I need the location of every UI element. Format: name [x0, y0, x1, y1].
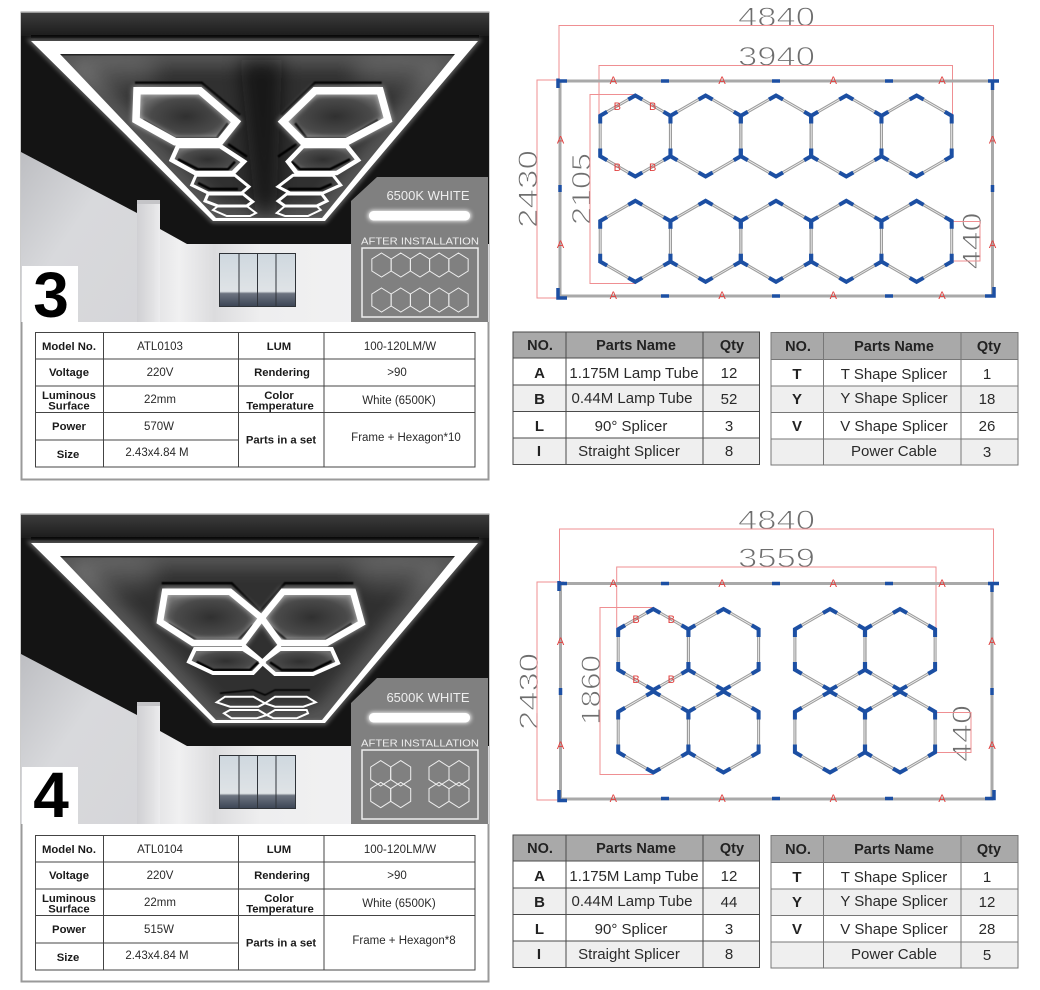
specification table: 100-120LM/W — [364, 844, 436, 856]
part labels: A — [610, 75, 618, 87]
parts table: lamp tubes and splicers (kit 4): 12 — [721, 868, 737, 885]
part labels: A — [557, 239, 565, 251]
part labels: A — [610, 578, 618, 590]
parts table: lamp tubes and splicers (kit 4): A — [534, 868, 545, 885]
specification table: Parts in a set — [246, 938, 316, 950]
specification table: 22mm — [144, 897, 176, 909]
info overlay: colour and layout — [351, 678, 488, 824]
parts table: lamp tubes and splicers (kit 3): Parts Name — [596, 338, 676, 354]
part labels: A — [718, 793, 726, 805]
parts table: lamp tubes and splicers (kit 4): Parts Name — [596, 841, 676, 857]
specification table: Temperature — [246, 400, 314, 412]
ceiling render with room — [21, 13, 489, 322]
parts table: lamp tubes and splicers (kit 4): 3 — [725, 921, 733, 938]
info overlay: colour and layout — [351, 177, 488, 322]
part labels: A — [989, 134, 997, 146]
parts table: shape splicers and cable (kit 4): T — [792, 869, 802, 886]
part labels: A — [830, 793, 838, 805]
specification table: Rendering — [254, 870, 310, 882]
parts table: lamp tubes and splicers (kit 3): B — [534, 391, 545, 408]
info overlay: colour and layout: 6500K WHITE — [386, 188, 470, 203]
parts table: shape splicers and cable (kit 4): 12 — [979, 894, 995, 911]
parts table: lamp tubes and splicers (kit 3): A — [534, 365, 545, 382]
parts table: lamp tubes and splicers (kit 4): I — [537, 946, 541, 963]
part labels: A — [557, 740, 565, 752]
info overlay: colour and layout: AFTER INSTALLATION — [361, 236, 479, 248]
parts table: shape splicers and cable (kit 4) — [771, 836, 1018, 968]
parts table: shape splicers and cable (kit 3): T — [792, 366, 802, 383]
panel: kit 4 product card — [21, 514, 489, 982]
outer frame — [558, 78, 999, 298]
parts table: lamp tubes and splicers (kit 3): 3 — [725, 418, 733, 435]
part labels: B — [668, 614, 675, 626]
parts table: shape splicers and cable (kit 3): T Shape Splicer — [841, 366, 947, 383]
parts table: shape splicers and cable (kit 4): Power Cable — [851, 946, 937, 963]
specification table: 515W — [144, 924, 174, 936]
parts table: lamp tubes and splicers (kit 4): 0.44M Lamp Tube — [572, 893, 692, 910]
specification table: 22mm — [144, 394, 176, 406]
dimension lines: 2105 — [566, 153, 596, 225]
specification table: 220V — [147, 367, 174, 379]
parts table: lamp tubes and splicers (kit 4): Qty — [720, 841, 744, 857]
parts table: shape splicers and cable (kit 3): 18 — [979, 391, 995, 408]
parts table: shape splicers and cable (kit 3): Qty — [977, 339, 1001, 355]
specification table: Frame + Hexagon*8 — [352, 935, 456, 947]
ceiling render with hexagons and info overlay — [21, 515, 489, 831]
parts table: lamp tubes and splicers (kit 3): 0.44M Lamp Tube — [572, 390, 692, 407]
part labels: B — [632, 674, 640, 686]
specification table: Voltage — [49, 367, 89, 379]
dimension lines — [513, 2, 994, 298]
specification table: 570W — [144, 421, 174, 433]
parts table: shape splicers and cable (kit 3): 1 — [983, 366, 991, 383]
parts table: shape splicers and cable (kit 3): Y Shape Splicer — [840, 390, 948, 407]
parts table: lamp tubes and splicers (kit 4): 44 — [721, 894, 737, 911]
part labels: A — [557, 134, 565, 146]
part labels: B — [649, 162, 656, 174]
dimension lines: 3940 — [738, 42, 815, 72]
hexagon lights in perspective — [135, 83, 388, 216]
light frame — [31, 543, 478, 723]
parts table: lamp tubes and splicers (kit 4) — [513, 835, 760, 968]
parts table: shape splicers and cable (kit 3): V Shape Splicer — [840, 418, 948, 435]
specification table: Luminous — [42, 390, 96, 402]
specification table: Surface — [48, 400, 90, 412]
parts table: shape splicers and cable (kit 4): 5 — [983, 947, 991, 964]
specification table: Power — [52, 421, 87, 433]
part labels: A — [718, 75, 726, 87]
parts table: lamp tubes and splicers (kit 4): 90° Splicer — [595, 921, 667, 938]
specification table — [36, 836, 475, 970]
specification table: LUM — [267, 341, 291, 353]
model number badge: 3 — [33, 259, 69, 331]
specification table: ATL0103 — [137, 341, 183, 353]
parts table: lamp tubes and splicers (kit 4): L — [535, 921, 544, 938]
parts table: shape splicers and cable (kit 4): Y — [792, 894, 802, 911]
parts table: shape splicers and cable (kit 3) — [771, 332, 1018, 465]
parts table: lamp tubes and splicers (kit 3): 90° Splicer — [595, 418, 667, 435]
part labels: A — [610, 793, 618, 805]
specification table: >90 — [387, 367, 407, 379]
dimension lines: 2430 — [513, 150, 543, 228]
parts table: shape splicers and cable (kit 4): V Shape Splicer — [840, 921, 948, 938]
specification table: Color — [264, 390, 294, 402]
parts table: shape splicers and cable (kit 3): NO. — [785, 339, 811, 355]
dimension lines — [514, 505, 994, 800]
part labels: A — [988, 636, 996, 648]
parts table: lamp tubes and splicers (kit 3): Qty — [720, 338, 744, 354]
parts table: shape splicers and cable (kit 3): Power Cable — [851, 443, 937, 460]
specification table: Size — [57, 952, 79, 964]
part labels: A — [830, 75, 838, 87]
part labels: A — [557, 636, 565, 648]
parts table: shape splicers and cable (kit 3): Y — [792, 391, 802, 408]
parts table: shape splicers and cable (kit 4): 1 — [983, 869, 991, 886]
part labels: A — [938, 75, 946, 87]
parts table: lamp tubes and splicers (kit 3): Straight Splicer — [578, 443, 680, 460]
specification table: Size — [57, 449, 79, 461]
parts table: lamp tubes and splicers (kit 4): 8 — [725, 946, 733, 963]
dimension lines: 440 — [947, 705, 977, 762]
specification table: LUM — [267, 844, 291, 856]
part labels: B — [614, 162, 621, 174]
parts table: lamp tubes and splicers (kit 3) — [513, 332, 760, 464]
parts table: shape splicers and cable (kit 4): Parts Name — [854, 842, 934, 858]
info overlay: colour and layout: 6500K WHITE — [386, 690, 470, 705]
parts table: lamp tubes and splicers (kit 3): NO. — [527, 338, 553, 354]
parts table: lamp tubes and splicers (kit 4): B — [534, 894, 545, 911]
specification table: 100-120LM/W — [364, 341, 436, 353]
parts table: shape splicers and cable (kit 3): Parts Name — [854, 339, 934, 355]
specification table: 2.43x4.84 M — [125, 950, 189, 962]
specification table: Luminous — [42, 893, 96, 905]
dimension lines: 4840 — [738, 2, 815, 32]
model number badge — [22, 759, 78, 831]
parts table: shape splicers and cable (kit 4): NO. — [785, 842, 811, 858]
diagram: kit 4 layout drawing — [514, 505, 999, 805]
specification table: Voltage — [49, 870, 89, 882]
part labels: A — [830, 290, 838, 302]
part labels: B — [632, 614, 640, 626]
specification table: Color — [264, 893, 294, 905]
hexagons — [600, 96, 952, 282]
model number badge: 4 — [33, 759, 69, 831]
specification table: Frame + Hexagon*10 — [351, 432, 461, 444]
part labels: A — [988, 740, 996, 752]
part labels: B — [668, 674, 675, 686]
part labels — [557, 75, 997, 302]
dimension lines: 440 — [957, 212, 987, 270]
part labels: A — [718, 578, 726, 590]
part labels: A — [718, 290, 726, 302]
parts table: lamp tubes and splicers (kit 3): L — [535, 418, 544, 435]
parts table: lamp tubes and splicers (kit 3): I — [537, 443, 541, 460]
light frame — [31, 41, 478, 221]
part labels: A — [830, 578, 838, 590]
parts table: shape splicers and cable (kit 4): Qty — [977, 842, 1001, 858]
model number badge — [22, 259, 78, 331]
parts table: lamp tubes and splicers (kit 4): NO. — [527, 841, 553, 857]
parts table: lamp tubes and splicers (kit 3): 12 — [721, 365, 737, 382]
outer frame — [559, 581, 999, 800]
specification table: Model No. — [42, 341, 96, 353]
specification table: White (6500K) — [362, 395, 436, 407]
specification table: 2.43x4.84 M — [125, 447, 189, 459]
parts table: lamp tubes and splicers (kit 3): 8 — [725, 443, 733, 460]
part labels: A — [938, 793, 946, 805]
parts table: shape splicers and cable (kit 3): 26 — [979, 418, 995, 435]
diagram: kit 3 layout drawing — [513, 2, 999, 302]
part labels — [557, 578, 996, 805]
specification table: >90 — [387, 870, 407, 882]
dimension lines: 1860 — [576, 655, 606, 725]
part labels: B — [649, 101, 656, 113]
parts table: lamp tubes and splicers (kit 4): Straight Splicer — [578, 946, 680, 963]
specification table — [36, 332, 475, 467]
specification table: ATL0104 — [137, 844, 184, 856]
part labels: A — [989, 239, 997, 251]
specification table: Parts in a set — [246, 434, 316, 446]
specification table: Surface — [48, 904, 90, 916]
parts table: shape splicers and cable (kit 4): Y Shape Splicer — [840, 893, 948, 910]
parts table: lamp tubes and splicers (kit 4): 1.175M Lamp Tube — [569, 868, 699, 885]
parts table: shape splicers and cable (kit 4): V — [792, 921, 802, 938]
specification table: Rendering — [254, 367, 310, 379]
part labels: B — [614, 101, 621, 113]
specification table: White (6500K) — [362, 898, 436, 910]
room — [21, 515, 489, 824]
hexagon lights in perspective — [160, 583, 362, 718]
parts table: shape splicers and cable (kit 3): V — [792, 418, 802, 435]
part labels: A — [938, 290, 946, 302]
dimension lines: 3559 — [738, 543, 815, 573]
central dark axis — [240, 60, 282, 216]
parts table: shape splicers and cable (kit 4): 28 — [979, 921, 995, 938]
hexagons — [618, 609, 935, 772]
parts table: lamp tubes and splicers (kit 3): 52 — [721, 391, 737, 408]
specification table: 220V — [147, 870, 174, 882]
specification table: Power — [52, 924, 87, 936]
parts table: shape splicers and cable (kit 3): 3 — [983, 444, 991, 461]
panel: kit 3 product card — [21, 12, 489, 480]
specification table: Model No. — [42, 844, 96, 856]
specification table: Temperature — [246, 904, 314, 916]
parts table: shape splicers and cable (kit 4): T Shape Splicer — [841, 869, 947, 886]
part labels: A — [938, 578, 946, 590]
dimension lines: 2430 — [514, 653, 544, 730]
dimension lines: 4840 — [738, 505, 815, 535]
part labels: A — [610, 290, 618, 302]
parts table: lamp tubes and splicers (kit 3): 1.175M Lamp Tube — [569, 365, 699, 382]
info overlay: colour and layout: AFTER INSTALLATION — [361, 738, 479, 750]
